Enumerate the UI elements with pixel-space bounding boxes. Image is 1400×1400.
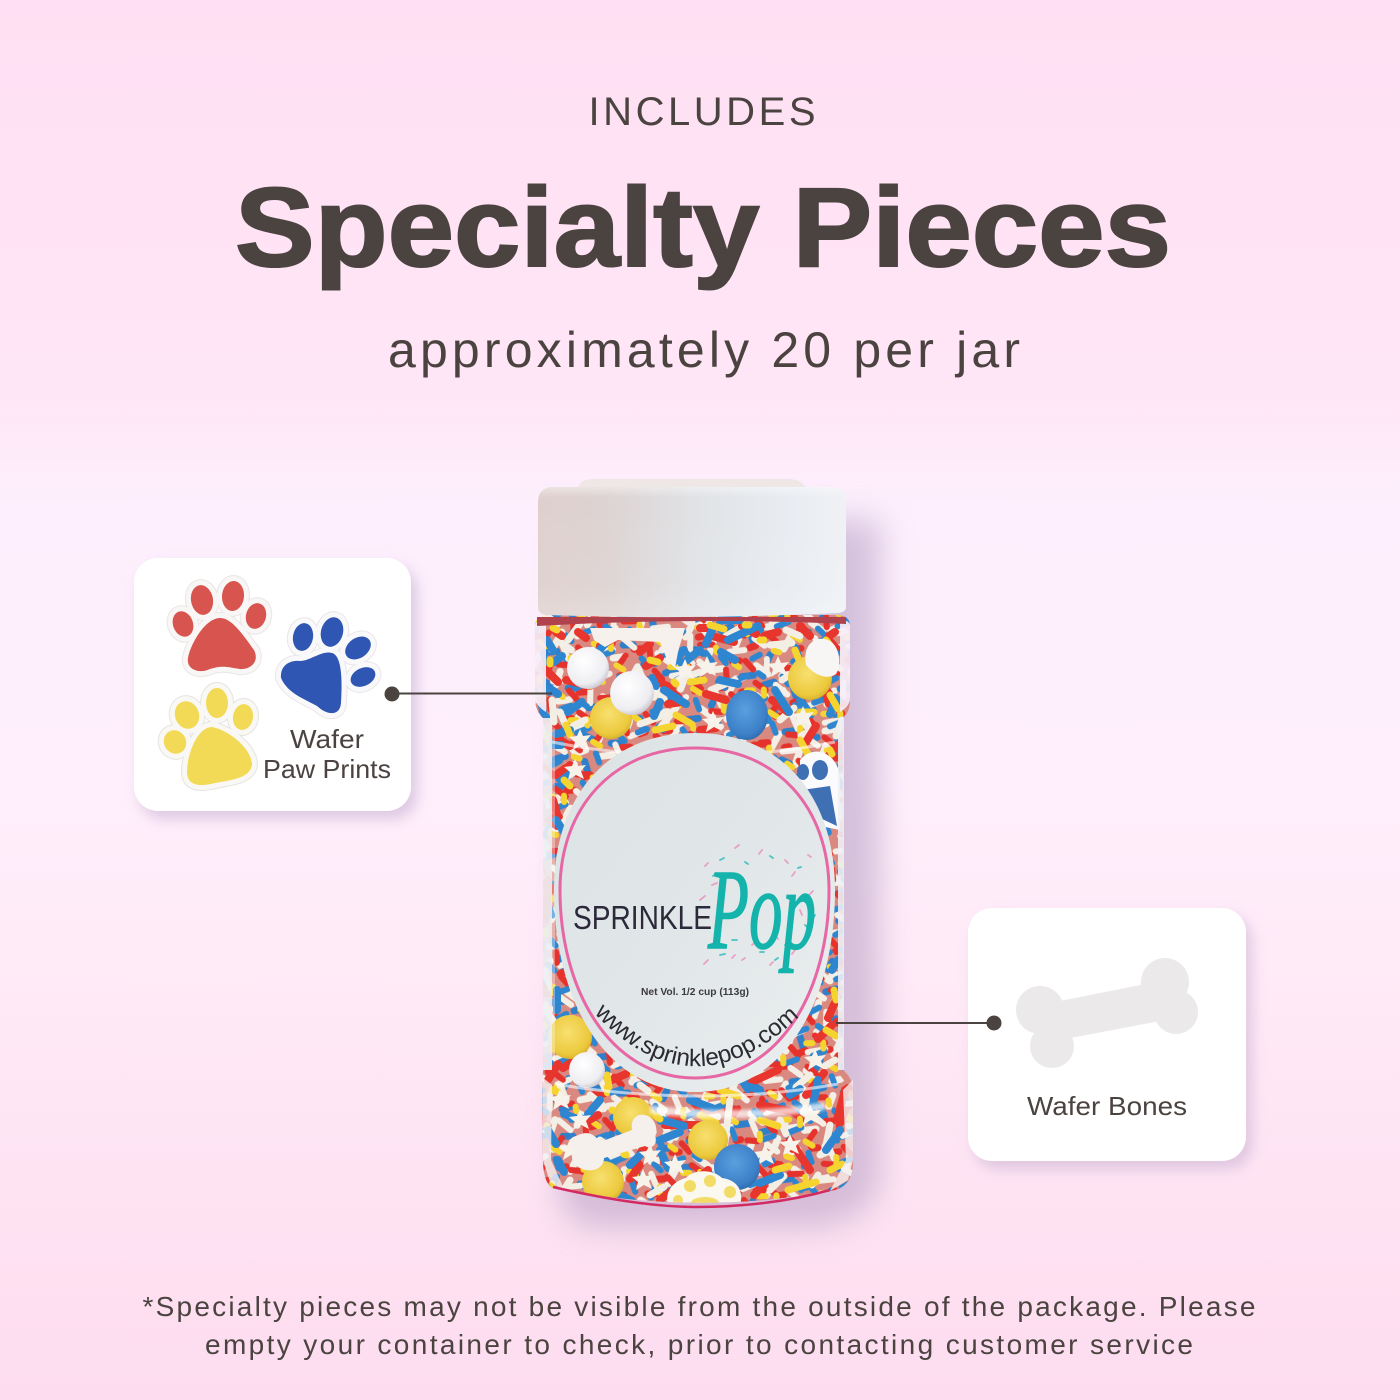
jar neck bbox=[537, 617, 846, 626]
icon: yellow paw bbox=[159, 688, 255, 785]
footnote line 2: empty your container to check, prior to contacting customer service bbox=[205, 1329, 1193, 1360]
logo: SPRINKLE: SPRINKLE bbox=[573, 899, 712, 936]
panel: wafer paw prints bbox=[134, 558, 417, 819]
product jar bbox=[535, 479, 894, 1242]
icon: red paw bbox=[169, 580, 269, 671]
wafer paw behind label bbox=[797, 752, 840, 830]
subtitle: approximately 20 per jar bbox=[388, 322, 1020, 378]
label: wafer: Wafer bbox=[290, 724, 364, 754]
icon: bone bbox=[1016, 958, 1198, 1068]
card bbox=[134, 558, 411, 811]
confetti bbox=[700, 845, 813, 965]
label ring bbox=[560, 748, 829, 1078]
label bbox=[554, 733, 835, 1092]
jar cap bbox=[538, 487, 846, 617]
card shadow bbox=[140, 566, 417, 819]
footnote line 1: *Specialty pieces may not be visible from the outside of the package. Please bbox=[142, 1291, 1256, 1322]
jar plastic overlay bbox=[535, 620, 853, 1207]
heading: includes: INCLUDES bbox=[588, 90, 816, 134]
wafer paw bottom bbox=[667, 1171, 742, 1203]
label: wafer bones: Wafer Bones bbox=[1027, 1091, 1187, 1121]
wafer bone in jar bbox=[569, 1115, 656, 1170]
jar contents: sprinkles bbox=[535, 615, 855, 1215]
logo: Pop: Pop bbox=[707, 846, 816, 973]
sugar balls bbox=[788, 656, 832, 700]
stars bbox=[549, 656, 826, 1190]
jar cap nub bbox=[578, 479, 806, 490]
jar shadow bbox=[560, 520, 880, 1228]
icon: blue paw bbox=[281, 615, 379, 713]
jar cap shading bbox=[538, 487, 846, 617]
label: paw prints: Paw Prints bbox=[263, 754, 391, 784]
net volume: Net Vol. 1/2 cup (113g) bbox=[641, 986, 749, 998]
callout: bones bbox=[836, 1016, 1002, 1030]
website: www.sprinklepop.com bbox=[596, 1004, 798, 1068]
title: Specialty Pieces bbox=[235, 165, 1171, 290]
specialty wafer top bbox=[590, 628, 685, 668]
card bbox=[968, 908, 1246, 1161]
footnote bbox=[142, 1291, 1256, 1360]
callout: paw prints bbox=[384, 686, 552, 702]
panel: wafer bones bbox=[968, 908, 1252, 1169]
card shadow bbox=[974, 916, 1252, 1169]
